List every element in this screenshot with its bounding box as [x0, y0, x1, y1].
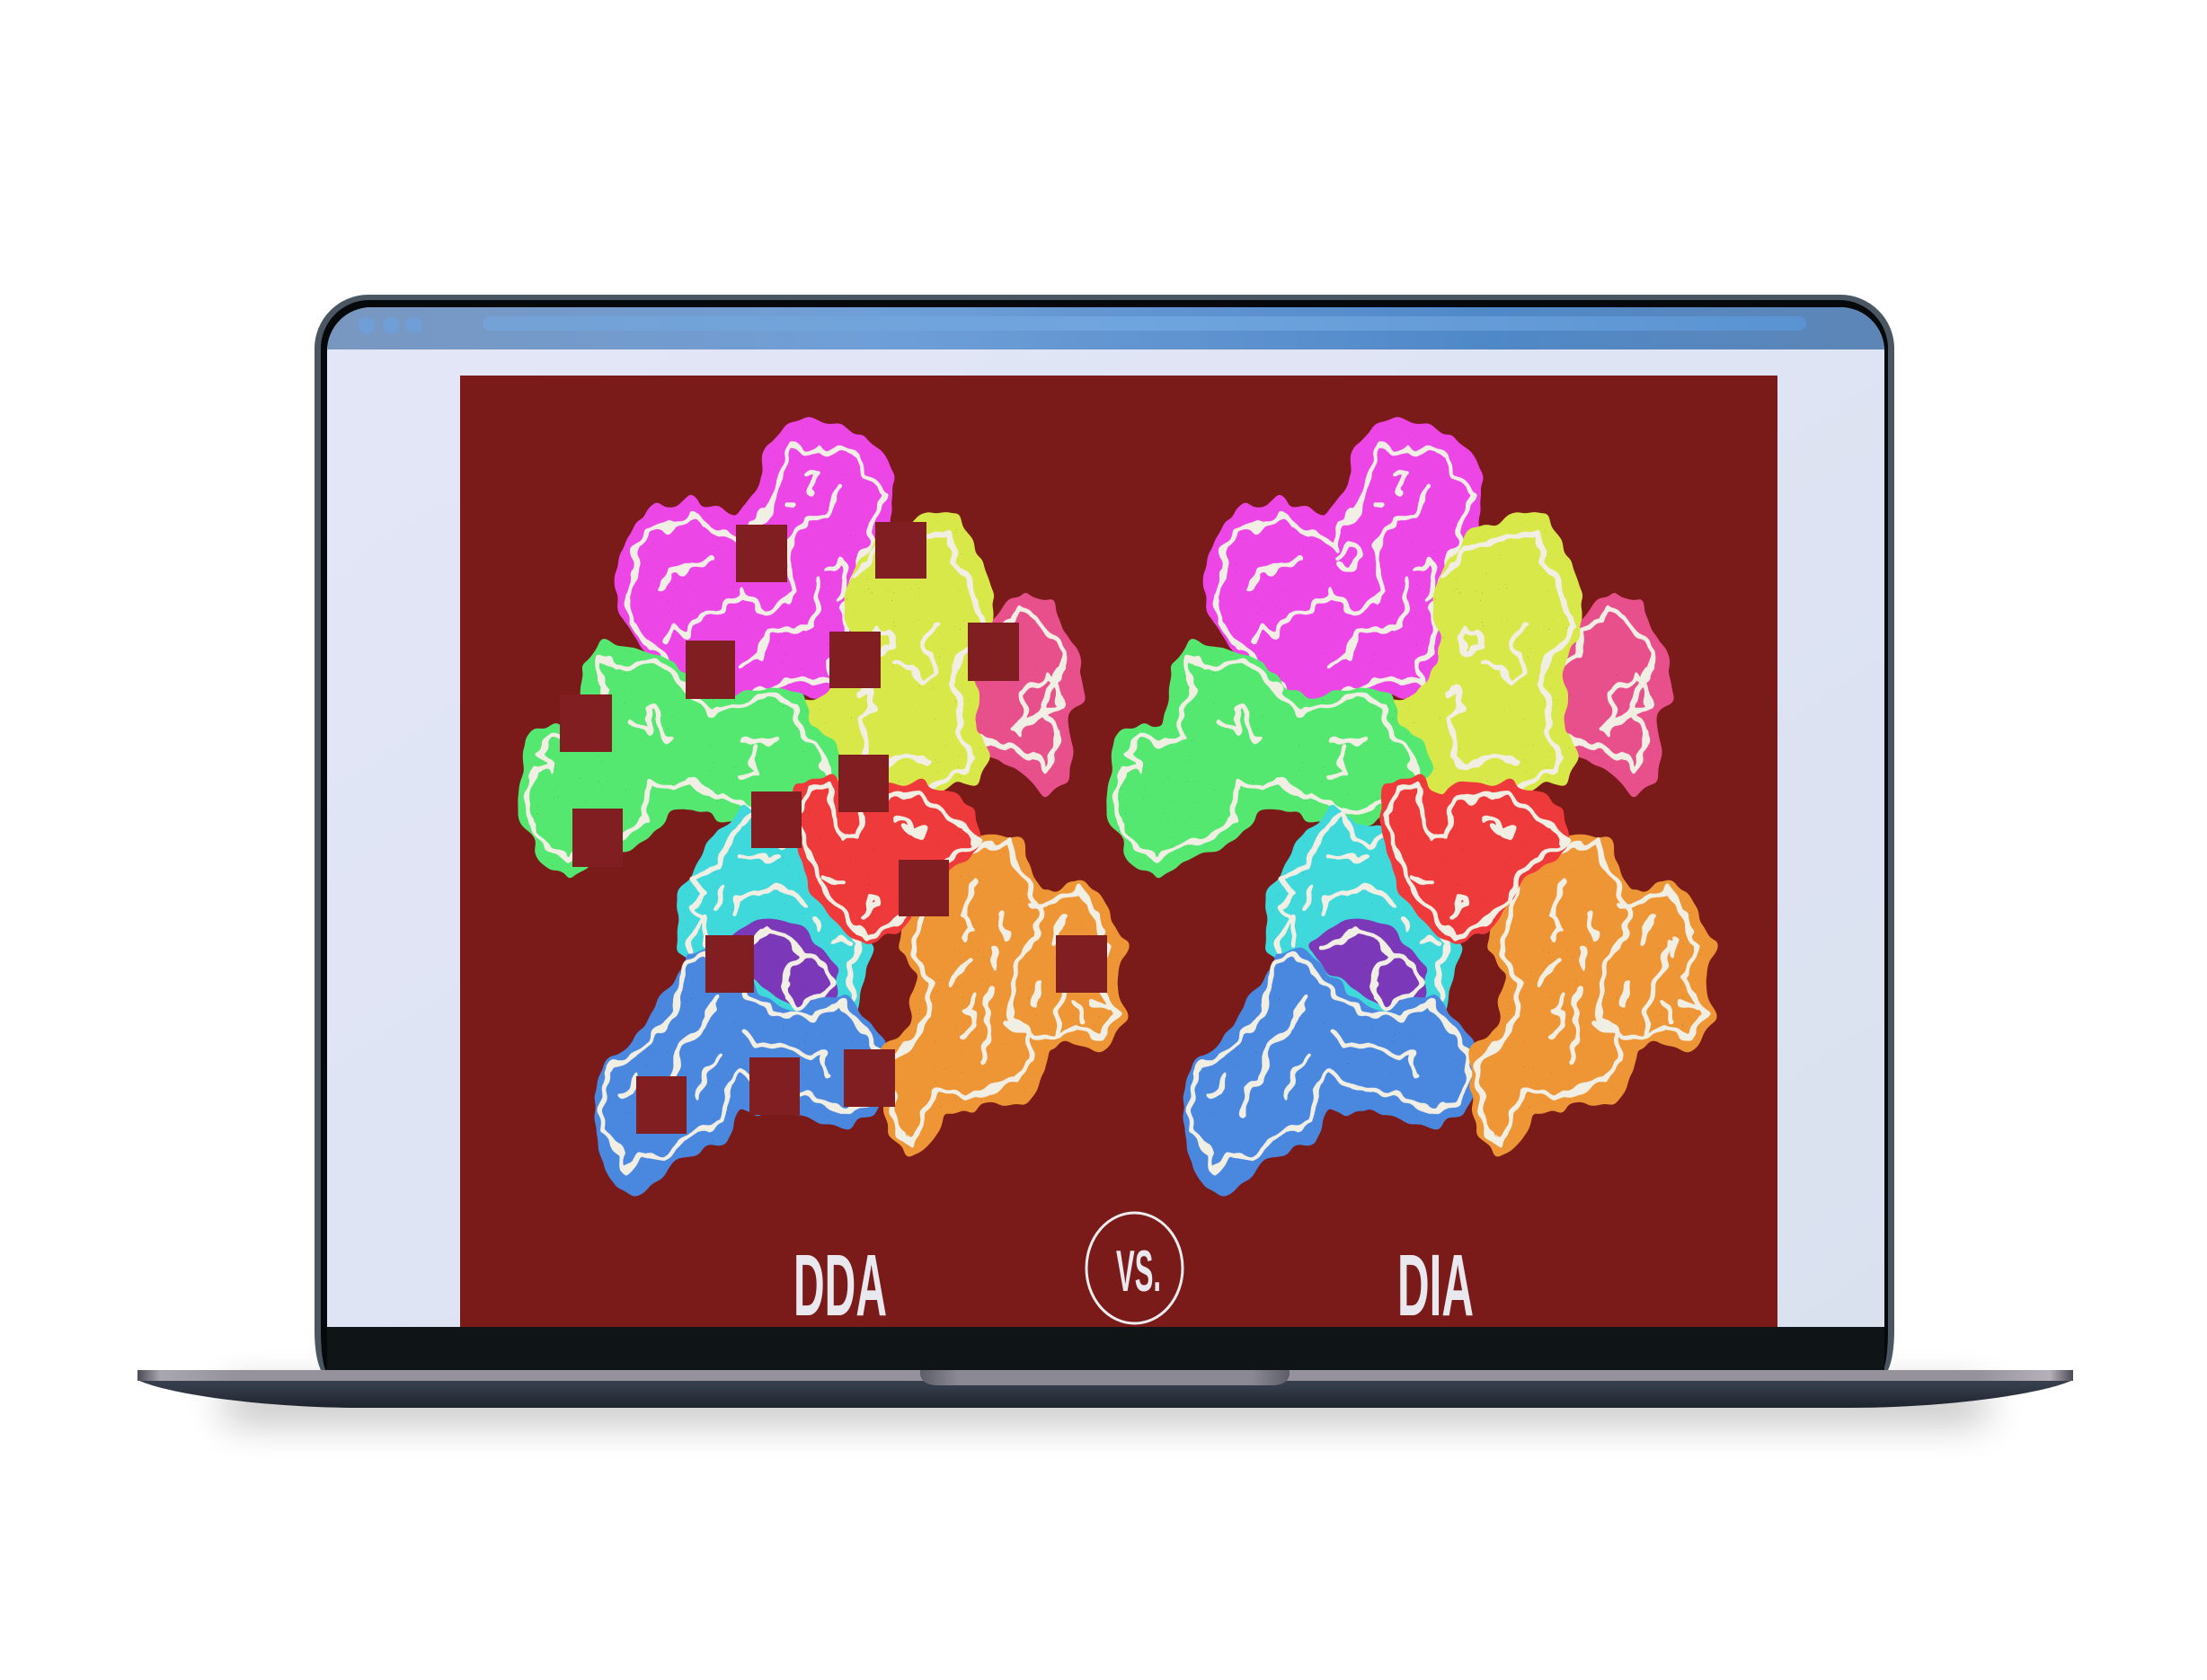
protein complex DDA [521, 426, 1121, 1189]
protein: blue [1188, 955, 1477, 1189]
protein: magenta [1209, 426, 1477, 712]
address bar [483, 316, 1806, 331]
protein: orange [1475, 842, 1710, 1147]
shadow under laptop [225, 1388, 1986, 1420]
window dots [358, 316, 422, 334]
protein: cyan [1269, 813, 1457, 1009]
VS. badge [1086, 1213, 1183, 1323]
protein: green [1110, 646, 1429, 871]
protein: purple [1315, 924, 1423, 1009]
laptop base [137, 1370, 2073, 1408]
DDA missing-value squares [560, 522, 1107, 1134]
label: DIA: DIA [1397, 1236, 1474, 1334]
laptop lid frame [315, 295, 1894, 1370]
protein complex DIA [1110, 426, 1710, 1189]
text: DDA [793, 1236, 887, 1334]
protein: yellow [1397, 517, 1578, 823]
protein: red [1385, 782, 1566, 940]
browser title bar [327, 307, 1884, 351]
screen [327, 307, 1884, 1327]
protein: pink [1553, 599, 1665, 791]
VS. badge: VS. [1116, 1238, 1161, 1304]
panel: dark red slide [460, 376, 1777, 1327]
hinge notch [920, 1370, 1290, 1385]
